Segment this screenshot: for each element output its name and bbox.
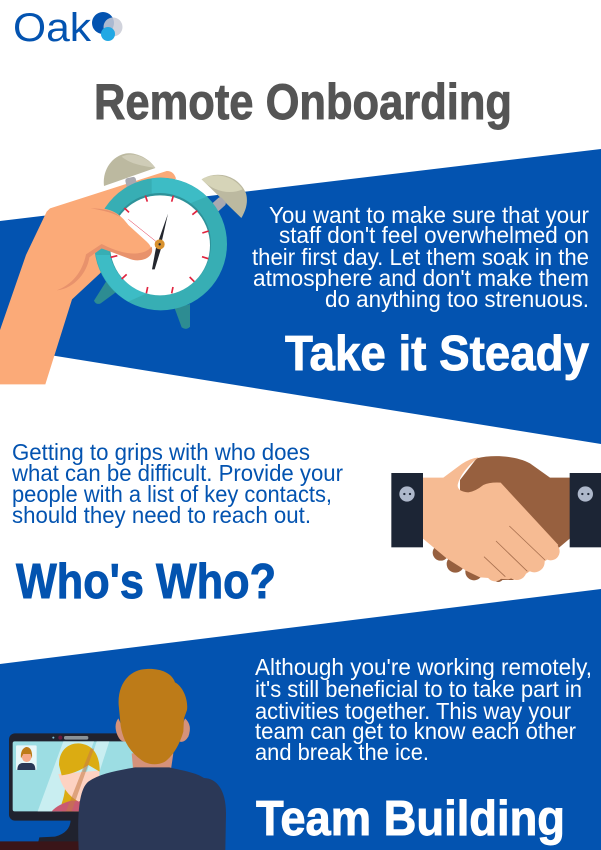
heading: who's who: Who's Who? bbox=[16, 555, 276, 609]
clock ticks bbox=[111, 196, 209, 293]
heading: team building: Team Building bbox=[256, 792, 565, 846]
icon: handshake bbox=[391, 456, 601, 582]
hand back bbox=[0, 171, 176, 384]
clock feet bbox=[94, 282, 190, 329]
clock hands bbox=[128, 214, 168, 269]
illustration: video call bbox=[0, 669, 226, 850]
text block: who's who: Getting to grips with who does bbox=[12, 439, 310, 465]
text block: team building bbox=[255, 654, 592, 765]
text block: team building: activities together. This way your bbox=[255, 698, 571, 724]
light hand bbox=[423, 457, 560, 581]
logo: Oak: Oak bbox=[13, 6, 92, 50]
self-view thumbnail bbox=[16, 745, 37, 770]
monitor bbox=[0, 733, 142, 850]
panel: blue band take it steady bbox=[0, 149, 601, 444]
woman on screen bbox=[52, 743, 100, 811]
text block: take it steady bbox=[252, 202, 589, 312]
text block: who's who bbox=[11, 439, 343, 528]
text block: take it steady: their first day. Let them soak in the bbox=[252, 244, 589, 270]
text block: team building: Although you're working remotely, bbox=[255, 654, 592, 680]
text block: take it steady: atmosphere and don't make them bbox=[253, 265, 589, 291]
text block: take it steady: do anything too strenuous. bbox=[325, 286, 589, 312]
text block: team building: it's still beneficial to to take part in bbox=[255, 676, 582, 702]
panel: blue band team building bbox=[0, 589, 601, 850]
man's ears and neck bbox=[116, 718, 190, 772]
icon: hand holding alarm clock bbox=[0, 153, 247, 384]
text block: take it steady: You want to make sure that your bbox=[269, 202, 589, 228]
title: Remote Onboarding bbox=[94, 74, 512, 130]
clock body bbox=[94, 178, 227, 310]
clock bells bbox=[104, 153, 247, 218]
text block: who's who: what can be difficult. Provide your bbox=[11, 460, 343, 486]
text block: team building: team can get to know each other bbox=[255, 718, 576, 744]
text block: who's who: people with a list of key contacts, bbox=[12, 481, 332, 507]
dark hand bbox=[433, 456, 570, 582]
thumb bbox=[57, 208, 152, 290]
left cuff bbox=[391, 473, 423, 547]
logo: Oak bbox=[13, 6, 122, 50]
bell stem bbox=[125, 176, 139, 197]
text block: who's who: should they need to reach out. bbox=[12, 502, 311, 528]
man's torso bbox=[78, 767, 226, 850]
text block: team building: and break the ice. bbox=[255, 739, 429, 765]
finger lines bbox=[484, 526, 545, 577]
right cuff bbox=[570, 473, 601, 547]
text block: take it steady: staff don't feel overwhelmed on bbox=[279, 222, 589, 248]
man's hair bbox=[119, 669, 187, 764]
